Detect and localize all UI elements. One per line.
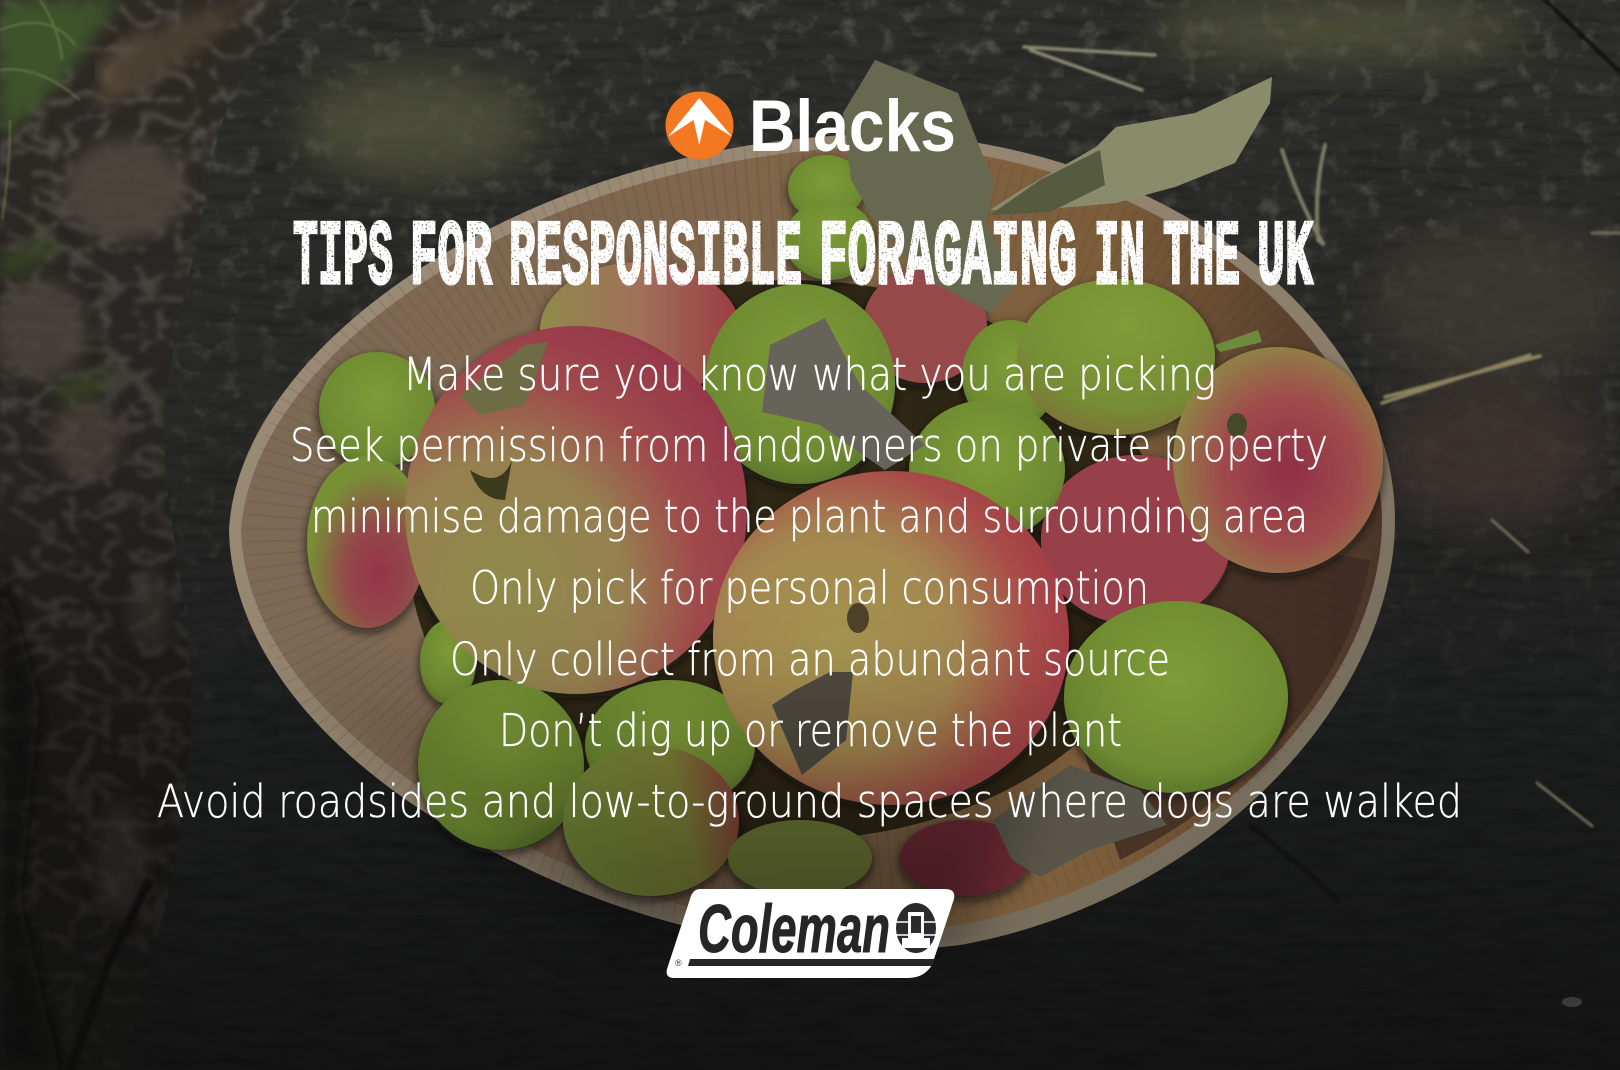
title: RESPONSIBLE <box>509 206 802 311</box>
title <box>293 206 1313 311</box>
apples <box>307 155 1383 896</box>
tip 2: Seek permission from landowners on private property <box>290 419 1328 472</box>
tip 5: Only collect from an abundant source <box>450 633 1170 686</box>
title: THE <box>1163 206 1240 311</box>
apple stems and blemishes <box>470 413 1247 775</box>
icon: orange circle with arrowhead <box>666 92 734 160</box>
wordmark: Coleman <box>698 891 890 967</box>
logo: Coleman <box>667 889 954 978</box>
registered mark: ® <box>675 958 682 968</box>
wordmark: Blacks <box>749 86 956 167</box>
title: FOR <box>410 206 492 311</box>
title: UK <box>1257 206 1313 311</box>
grass <box>0 0 250 400</box>
title: TIPS <box>293 206 393 311</box>
tip 1: Make sure you know what you are picking <box>403 348 1216 401</box>
logo: Blacks <box>666 86 956 167</box>
icon: lantern <box>896 903 936 953</box>
title: IN <box>1094 206 1145 311</box>
pine needles and cracks <box>1024 0 1620 900</box>
badge <box>667 889 954 978</box>
lower bowl shade <box>229 650 1100 950</box>
fruit bowl <box>229 134 1395 950</box>
leaves <box>460 60 1272 877</box>
tip 6: Don’t dig up or remove the plant <box>499 704 1122 757</box>
bark edge <box>0 0 300 1070</box>
tip 4: Only pick for personal consumption <box>470 562 1149 614</box>
tip 3: minimise damage to the plant and surrounding area <box>311 490 1308 543</box>
tips list <box>157 348 1462 828</box>
underline <box>688 959 935 966</box>
title: FORAGAING <box>819 206 1077 311</box>
tip 7: Avoid roadsides and low-to-ground spaces where dogs are walked <box>157 775 1462 828</box>
